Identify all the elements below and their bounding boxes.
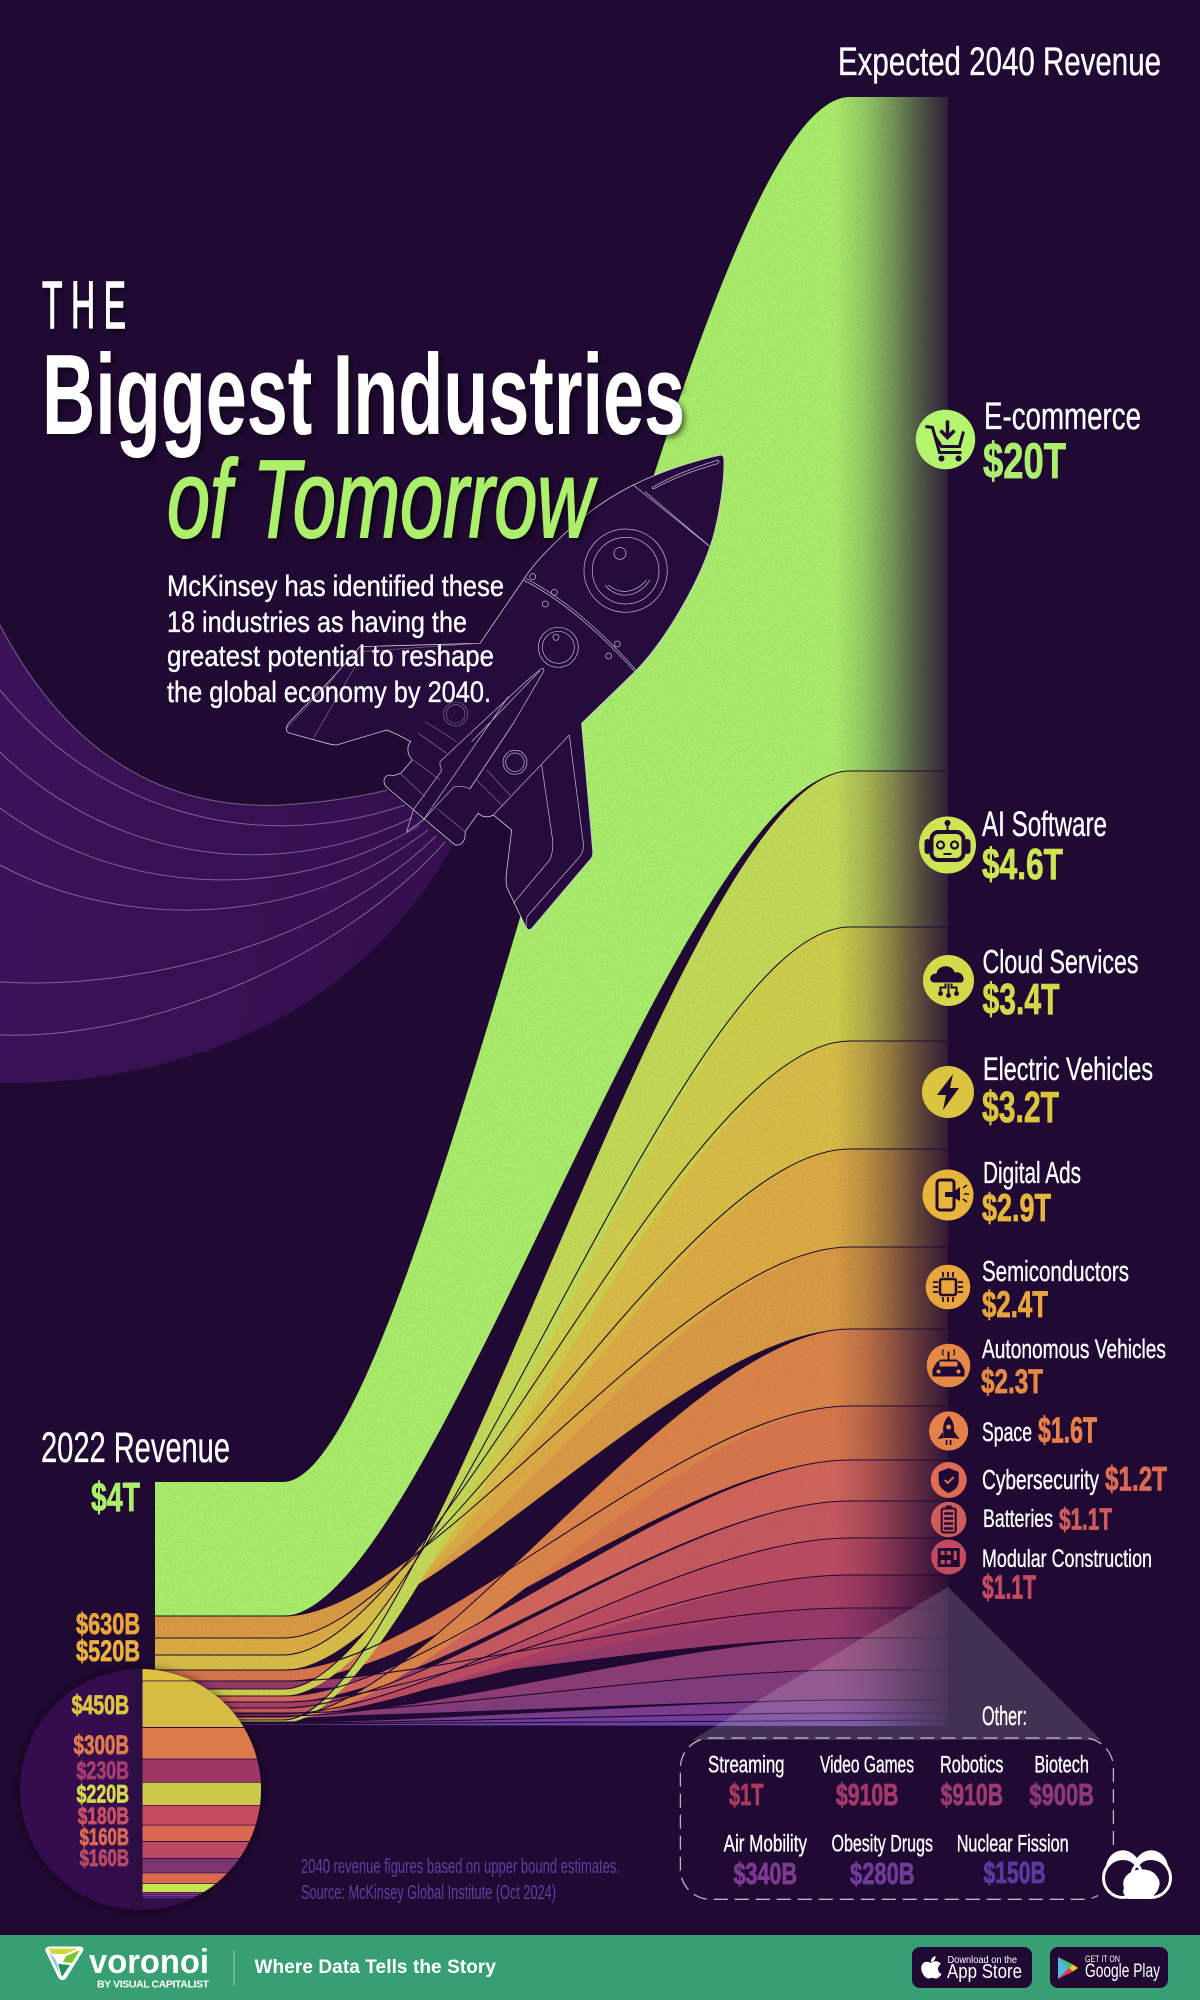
tagline: Where Data Tells the Story xyxy=(254,1957,496,1978)
item: space: Space xyxy=(982,1417,1032,1447)
item: ai software: AI Software xyxy=(982,805,1107,844)
source note xyxy=(301,1856,620,1904)
icon: lightning bolt xyxy=(922,1066,974,1118)
voronoi logo xyxy=(45,1943,210,1990)
item: autonomous vehicles: $2.3T xyxy=(981,1363,1043,1401)
panel: other industries xyxy=(680,1738,1113,1899)
band: streaming xyxy=(155,1575,948,1708)
band: cybersecurity xyxy=(155,1460,948,1702)
item: biotech xyxy=(1029,1752,1094,1812)
value: 630B: $630B xyxy=(76,1608,140,1641)
item: e-commerce: E-commerce xyxy=(984,396,1141,438)
item: electric vehicles: $3.2T xyxy=(982,1083,1059,1132)
heading: 2022 revenue: 2022 Revenue xyxy=(41,1424,230,1472)
band: modular construction xyxy=(155,1538,948,1716)
magnified value labels: $230B xyxy=(76,1757,129,1785)
icon: shield xyxy=(931,1462,967,1498)
magnified value labels: $180B xyxy=(78,1803,129,1830)
item: cloud services: Cloud Services xyxy=(982,943,1138,980)
icon: car with antenna xyxy=(927,1344,970,1387)
icon: rocket xyxy=(929,1411,968,1451)
magnified value labels: $450B xyxy=(72,1690,129,1720)
band: e-commerce xyxy=(155,97,948,1616)
magnified value labels xyxy=(72,1690,129,1872)
item: video games xyxy=(820,1752,914,1812)
item: digital ads: $2.9T xyxy=(982,1187,1051,1230)
item: cybersecurity: Cybersecurity xyxy=(982,1464,1099,1495)
right fade overlay xyxy=(835,90,948,1730)
value: 520B: $520B xyxy=(76,1635,140,1668)
item: robotics: $910B xyxy=(941,1777,1003,1812)
band: space xyxy=(155,1406,948,1681)
icon: building xyxy=(931,1540,966,1574)
voronoi logo: voronoi xyxy=(89,1943,209,1981)
item: cybersecurity: $1.2T xyxy=(1105,1461,1167,1499)
band: obesity drugs xyxy=(155,1713,948,1724)
intro paragraph: 18 industries as having the xyxy=(167,606,467,639)
icon: battery xyxy=(931,1502,966,1537)
item: modular construction: $1.1T xyxy=(982,1568,1036,1606)
item: semiconductors xyxy=(926,1256,1129,1325)
icon: shopping cart xyxy=(916,410,975,469)
item: semiconductors: $2.4T xyxy=(982,1284,1048,1325)
item: digital ads: Digital Ads xyxy=(983,1155,1081,1190)
magnified value labels: $160B xyxy=(80,1824,129,1851)
item: air mobility xyxy=(724,1831,807,1891)
band: ai software xyxy=(155,771,948,1723)
icon: cloud xyxy=(923,955,974,1006)
voronoi logo: BY VISUAL CAPITALIST xyxy=(97,1978,210,1990)
item: biotech: Biotech xyxy=(1034,1752,1089,1779)
icon: phone and megaphone xyxy=(922,1170,974,1220)
magnified value labels: $220B xyxy=(76,1781,129,1809)
title: of tomorrow: of Tomorrow xyxy=(167,438,598,561)
band: cloud services xyxy=(155,927,948,1696)
google play badge: Google Play xyxy=(1085,1961,1160,1982)
intro paragraph xyxy=(167,570,504,709)
item: batteries xyxy=(931,1502,1112,1537)
item: modular construction xyxy=(931,1540,1152,1606)
app store badge: App Store xyxy=(947,1961,1022,1983)
item: streaming: $1T xyxy=(729,1777,763,1812)
item: biotech: $900B xyxy=(1029,1777,1094,1812)
item: air mobility: $340B xyxy=(734,1856,797,1891)
magnified rows xyxy=(142,1669,262,1898)
item: ai software: $4.6T xyxy=(982,840,1063,889)
item: ai software xyxy=(919,805,1107,889)
title: the: THE xyxy=(42,269,134,343)
item: robotics: Robotics xyxy=(940,1752,1003,1779)
magnifier circle xyxy=(20,1669,262,1910)
icon: chip xyxy=(926,1265,970,1309)
band: electric vehicles xyxy=(155,1041,948,1670)
item: electric vehicles xyxy=(922,1051,1153,1132)
magnified value labels: $300B xyxy=(74,1730,129,1760)
item: space: $1.6T xyxy=(1038,1410,1097,1451)
item: video games: Video Games xyxy=(820,1752,914,1779)
footer bar xyxy=(0,1935,1200,2000)
band: semiconductors xyxy=(155,1247,948,1638)
google play badge: GET IT ON xyxy=(1085,1954,1120,1965)
item: obesity drugs xyxy=(832,1831,933,1891)
item: streaming: Streaming xyxy=(708,1752,784,1779)
item: robotics xyxy=(940,1752,1003,1812)
band: digital ads xyxy=(155,1149,948,1655)
icon: voronoi mark xyxy=(45,1946,83,1980)
item: batteries: $1.1T xyxy=(1059,1502,1112,1537)
item: semiconductors: Semiconductors xyxy=(982,1256,1129,1288)
item: nuclear fission: $150B xyxy=(984,1855,1046,1890)
item: nuclear fission xyxy=(957,1831,1069,1890)
band: autonomous vehicles xyxy=(155,1329,948,1720)
app store badge: Download on the xyxy=(948,1955,1017,1966)
item: cybersecurity xyxy=(931,1461,1167,1499)
item: video games: $910B xyxy=(836,1777,898,1812)
intro paragraph: greatest potential to reshape xyxy=(167,640,494,673)
icon: binoculars logo xyxy=(1098,1845,1176,1903)
item: nuclear fission: Nuclear Fission xyxy=(957,1831,1069,1858)
value: 4T: $4T xyxy=(91,1474,140,1520)
band: nuclear fission xyxy=(155,1720,948,1726)
item: autonomous vehicles xyxy=(927,1334,1166,1401)
band: robotics xyxy=(155,1638,948,1718)
source note: 2040 revenue figures based on upper bound estimates. xyxy=(301,1856,620,1878)
item: obesity drugs: $280B xyxy=(850,1856,915,1891)
intro paragraph: McKinsey has identified these xyxy=(167,570,504,603)
rocket exhaust contrail xyxy=(0,625,453,1083)
band: air mobility xyxy=(155,1700,948,1723)
item: air mobility: Air Mobility xyxy=(724,1831,807,1858)
band: batteries xyxy=(155,1501,948,1713)
band: biotech xyxy=(155,1670,948,1716)
item: e-commerce: $20T xyxy=(983,433,1066,489)
title: biggest industries: Biggest Industries xyxy=(42,332,685,459)
heading: other: Other: xyxy=(982,1701,1027,1731)
rocket illustration xyxy=(286,455,724,930)
item: batteries: Batteries xyxy=(983,1505,1053,1533)
item: cloud services xyxy=(923,943,1138,1024)
intro paragraph: the global economy by 2040. xyxy=(167,676,491,709)
source note: Source: McKinsey Global Institute (Oct 2024) xyxy=(301,1882,556,1904)
item: obesity drugs: Obesity Drugs xyxy=(832,1831,933,1858)
magnified value labels: $160B xyxy=(80,1845,129,1872)
item: streaming xyxy=(708,1752,784,1812)
icon: robot xyxy=(919,816,976,874)
item: cloud services: $3.4T xyxy=(982,975,1060,1024)
title xyxy=(42,269,685,561)
google play badge xyxy=(1050,1947,1168,1988)
item: space xyxy=(929,1410,1097,1451)
triangle callout to other xyxy=(692,1587,1101,1740)
sankey flow chart xyxy=(155,97,948,1726)
item: e-commerce xyxy=(916,396,1141,489)
item: digital ads xyxy=(922,1155,1081,1230)
app store badge xyxy=(912,1947,1032,1988)
band: video games xyxy=(155,1608,948,1689)
